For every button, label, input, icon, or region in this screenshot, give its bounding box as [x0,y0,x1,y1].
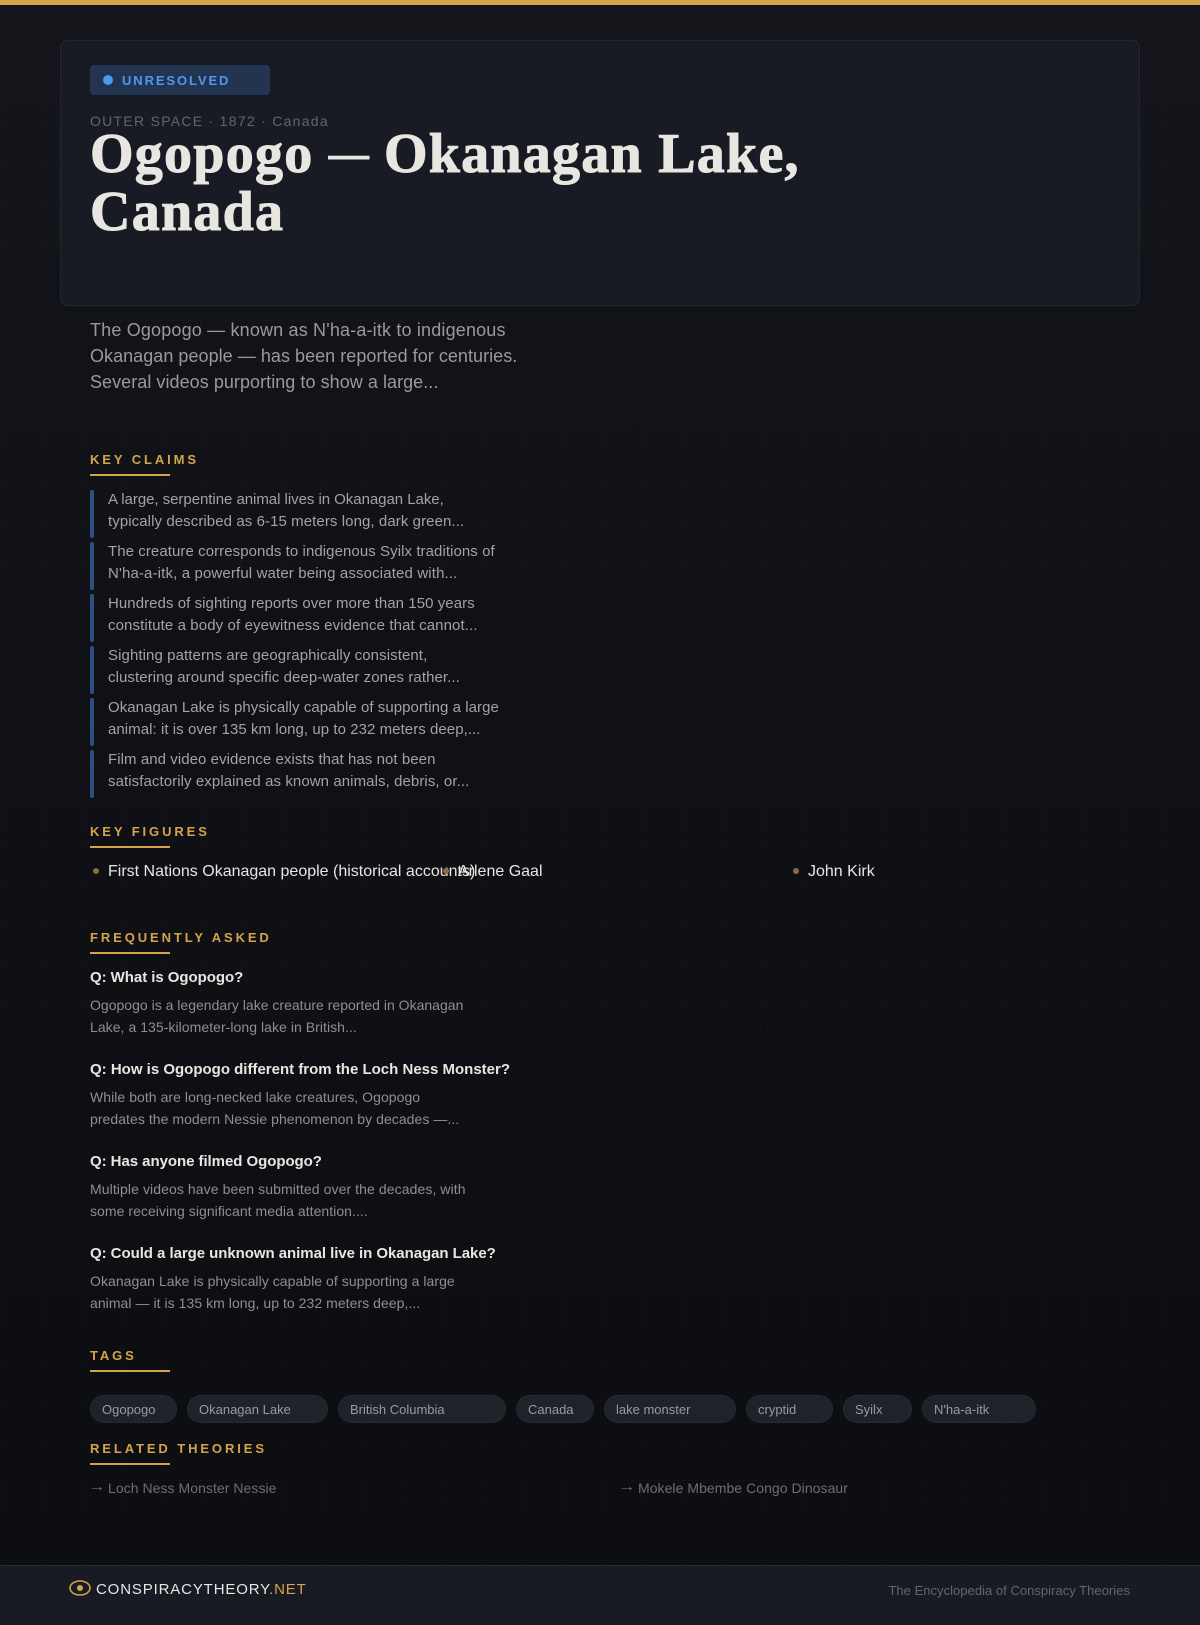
panel: header [60,40,1140,306]
heading: key claims: KEY CLAIMS [90,452,199,467]
icon: eye logo [69,1580,91,1596]
tag: Canada [516,1395,594,1423]
title: Canada [90,181,284,243]
claim 2: The creature corresponds to indigenous Syilx traditions of [108,543,495,560]
faq 1: Ogopogo is a legendary lake creature reported in Okanagan [90,997,463,1013]
faq 1 [90,969,463,1035]
claim 1: typically described as 6-15 meters long, dark green... [108,513,464,530]
faq 2: While both are long-necked lake creatures, Ogopogo [90,1089,420,1105]
tag: British Columbia [338,1395,506,1423]
faq 1: Q: What is Ogopogo? [90,969,243,986]
figure: First Nations: First Nations Okanagan people (historical accounts) [108,863,475,880]
related link: Mokele Mbembe: Mokele Mbembe Congo Dinosaur [638,1480,848,1496]
claim 5: Okanagan Lake is physically capable of supporting a large [108,699,499,716]
claim 6: Film and video evidence exists that has not been [108,751,435,768]
faq 4: Q: Could a large unknown animal live in Okanagan Lake? [90,1245,496,1262]
faq 2: Q: How is Ogopogo different from the Loch Ness Monster? [90,1061,510,1078]
footer [0,1565,1200,1625]
badge dot [103,75,113,85]
claim 1 [90,490,464,538]
faq 2 [90,1061,510,1127]
tag: British Columbia: British Columbia [350,1402,445,1417]
intro text [90,320,517,392]
faq 2: predates the modern Nessie phenomenon by decades —... [90,1111,459,1127]
faq 1: Lake, a 135-kilometer-long lake in British... [90,1019,357,1035]
logo wordmark: CONSPIRACYTHEORY.NET [96,1581,307,1598]
category meta line: OUTER SPACE · 1872 · Canada [90,113,329,129]
tag: Okanagan Lake [187,1395,328,1423]
tag: lake monster: lake monster [616,1402,690,1417]
tag: N'ha-a-itk: N'ha-a-itk [934,1402,989,1417]
faq 3: Q: Has anyone filmed Ogopogo? [90,1153,322,1170]
related link: Loch Ness: → [88,1478,106,1494]
claim 3 [90,594,478,642]
tag: Canada: Canada [528,1402,574,1417]
faq 3: some receiving significant media attention.... [90,1203,368,1219]
figure: John Kirk: John Kirk [808,863,875,880]
tag: cryptid [746,1395,833,1423]
top accent bar [0,0,1200,5]
claim 4 [90,646,460,694]
title [90,123,800,243]
tag: lake monster [604,1395,736,1423]
claim 4: clustering around specific deep-water zones rather... [108,669,460,686]
claim 6: satisfactorily explained as known animals, debris, or... [108,773,469,790]
related link: Loch Ness: Loch Ness Monster Nessie [108,1480,276,1496]
heading: tags: TAGS [90,1348,137,1363]
faq 3 [90,1153,466,1219]
tag: Okanagan Lake: Okanagan Lake [199,1402,291,1417]
tag: Syilx [843,1395,912,1423]
claim 5 [90,698,499,746]
status badge [90,65,270,95]
faq 4: Okanagan Lake is physically capable of supporting a large [90,1273,455,1289]
tag: Ogopogo [90,1395,177,1423]
heading: frequently asked: FREQUENTLY ASKED [90,930,272,945]
claim 2 [90,542,495,590]
heading: key figures: KEY FIGURES [90,824,210,839]
claim 5: animal: it is over 135 km long, up to 232 meters deep,... [108,721,480,738]
intro text: Several videos purporting to show a large... [90,372,438,392]
footer tagline: The Encyclopedia of Conspiracy Theories [888,1583,1130,1598]
faq 3: Multiple videos have been submitted over the decades, with [90,1181,466,1197]
figure: Arlene Gaal: Arlene Gaal [458,863,542,880]
faq 4 [90,1245,496,1311]
claim 3: constitute a body of eyewitness evidence that cannot... [108,617,478,634]
title: Ogopogo — Okanagan Lake, [90,123,800,185]
claim 3: Hundreds of sighting reports over more than 150 years [108,595,475,612]
tag: Ogopogo: Ogopogo [102,1402,156,1417]
claim 6 [90,750,469,798]
related link: Mokele Mbembe: → [618,1478,636,1494]
tag: N'ha-a-itk [922,1395,1036,1423]
badge label: UNRESOLVED [122,73,230,88]
heading: related theories: RELATED THEORIES [90,1441,267,1456]
intro text: Okanagan people — has been reported for centuries. [90,346,517,366]
claim 1: A large, serpentine animal lives in Okanagan Lake, [108,491,444,508]
claim 4: Sighting patterns are geographically consistent, [108,647,427,664]
claim 2: N'ha-a-itk, a powerful water being associated with... [108,565,457,582]
faq 4: animal — it is 135 km long, up to 232 meters deep,... [90,1295,420,1311]
tag: cryptid: cryptid [758,1402,796,1417]
tag: Syilx: Syilx [855,1402,882,1417]
intro text: The Ogopogo — known as N'ha-a-itk to indigenous [90,320,506,340]
